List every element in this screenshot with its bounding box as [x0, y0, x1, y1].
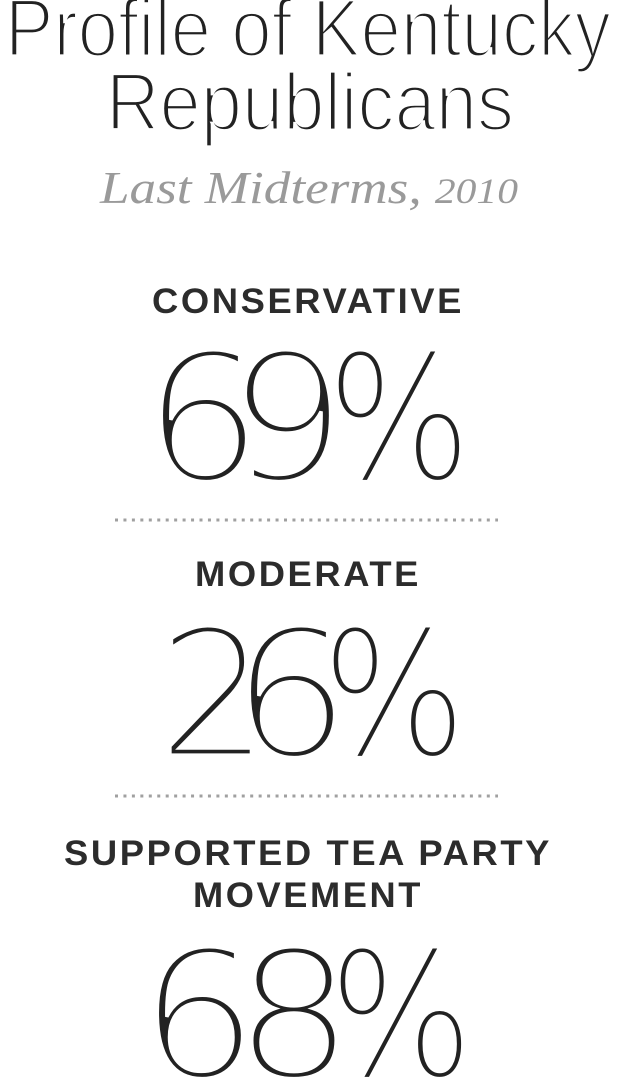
- subtitle: Last Midterms, 2010: [99, 162, 518, 213]
- stat: 26%: 2: [158, 594, 269, 797]
- stat: 69%: %: [326, 318, 472, 521]
- label: supported tea party movement: SUPPORTED TEA PARTY: [64, 834, 552, 873]
- divider: [115, 794, 498, 798]
- label: conservative: CONSERVATIVE: [152, 282, 464, 321]
- title: Republicans: [106, 57, 514, 148]
- label: supported tea party movement: MOVEMENT: [193, 876, 423, 915]
- label: supported tea party movement: [64, 834, 552, 915]
- stat: 69%: 9: [227, 318, 347, 521]
- stat: 26%: %: [321, 594, 467, 797]
- stat: 69%: 6: [143, 318, 263, 521]
- label: moderate: MODERATE: [195, 555, 421, 594]
- stat: 69%: [143, 318, 472, 521]
- title: [5, 0, 611, 148]
- stat: 68%: [139, 915, 474, 1085]
- divider: [115, 518, 498, 522]
- stat: 26%: [158, 594, 467, 797]
- stat: 26%: 6: [231, 594, 351, 797]
